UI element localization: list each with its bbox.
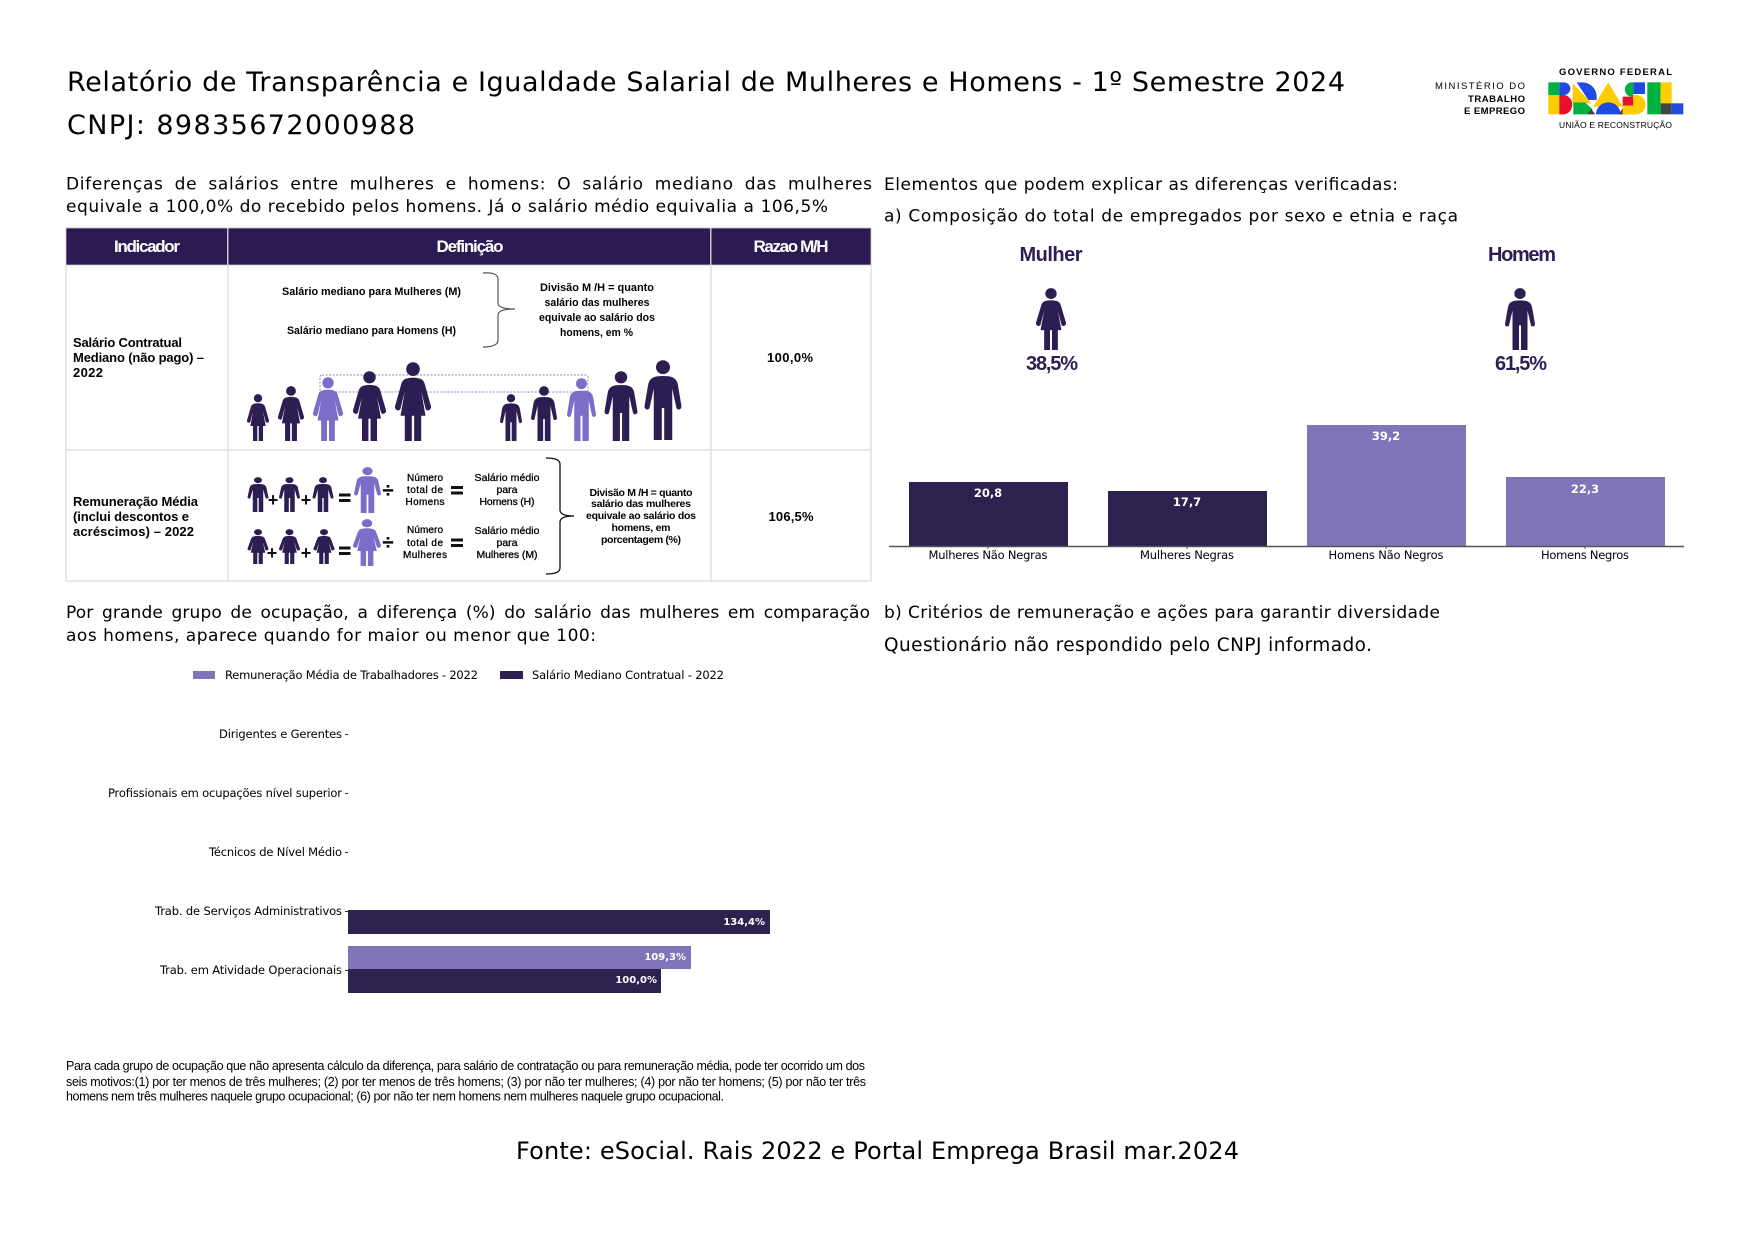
footnote: seis motivos:(1) por ter menos de três mulheres; (2) por ter menos de três homens; (3) por não ter mulheres; (4) por não ter homens; (5) por não ter três [66, 1075, 866, 1089]
icons: women ordered by salary [247, 362, 431, 441]
title [67, 67, 1345, 141]
icons: men ordered by salary [500, 360, 682, 441]
formula: women: Mulheres [403, 550, 447, 561]
formula: men: total de [407, 485, 443, 496]
row: Salário Contratual Mediano: Mediano (não pago) – [73, 350, 204, 365]
gender share: man: 61,5% [1495, 353, 1547, 375]
dashed median box [320, 375, 588, 392]
table header: Definição [436, 237, 504, 256]
text: division M/H: equivale ao salário dos [539, 312, 655, 324]
row: Remuneração Média [73, 458, 814, 574]
bar chart: occupation groups: Técnicos de Nível Médio [208, 845, 342, 859]
row: Remuneração Média: (inclui descontos e [73, 509, 189, 524]
bar chart: occupation groups: Profissionais em ocupações nível superior [108, 786, 342, 800]
heading: elements that explain differences [884, 175, 1458, 226]
text: division M/H in percent: porcentagem (%) [601, 534, 681, 546]
formula: women: ÷ [383, 532, 394, 554]
formula: men: ÷ [383, 480, 394, 502]
text: division M/H in percent: equivale ao salário dos [586, 510, 696, 522]
row: Remuneração Média: Remuneração Média [73, 494, 199, 509]
formula: men: Número [407, 473, 443, 484]
formula: women: + [267, 543, 277, 563]
formula: men: Homens (H) [480, 496, 534, 508]
text block: criteria [884, 603, 1440, 656]
text block: criteria: b) Critérios de remuneração e ações para garantir diversidade [884, 603, 1440, 623]
heading: elements that explain differences: Elementos que podem explicar as diferenças verificadas: [884, 175, 1398, 195]
bar chart: occupation groups [108, 727, 770, 993]
formula: men [248, 467, 540, 513]
formula: men: para [496, 484, 518, 496]
legend: Remuneração Média de Trabalhadores - 2022 [225, 668, 478, 682]
bar chart: occupation groups: Trab. em Atividade Operacionais [159, 963, 342, 977]
formula: women: Salário médio [474, 525, 540, 537]
formula: men: Salário médio [474, 472, 540, 484]
row: Salário Contratual Mediano: Salário mediano para Mulheres (M) [282, 286, 461, 298]
logo: Ministério do Trabalho e Emprego, Governo Federal [1435, 67, 1683, 130]
footnote: homens nem três mulheres naquele grupo ocupacional; (6) por não ter nem homens nem mulheres naquele grupo ocupacional. [66, 1090, 724, 1104]
source: Fonte: eSocial. Rais 2022 e Portal Emprega Brasil mar.2024 [516, 1137, 1239, 1165]
logo: Ministério do Trabalho e Emprego, Governo Federal: E EMPREGO [1464, 106, 1525, 117]
text: division M/H: salário das mulheres [544, 297, 650, 309]
bar chart: composition by sex and race: 39,2 [1372, 429, 1400, 443]
text: division M/H [539, 282, 655, 339]
text: division M/H in percent: homens, em [612, 522, 670, 534]
text: division M/H in percent: salário das mulheres [591, 498, 691, 510]
logo: Ministério do Trabalho e Emprego, Governo Federal: GOVERNO FEDERAL [1559, 67, 1672, 78]
bar chart: composition by sex and race: 20,8 [974, 486, 1002, 500]
formula: women: para [496, 537, 518, 549]
value 100,0%: 100,0% [767, 350, 813, 365]
text block: salary differences [66, 174, 872, 217]
text: division M/H: Divisão M /H = quanto [540, 282, 654, 294]
bar chart: occupation groups: Trab. de Serviços Administrativos [154, 904, 342, 918]
bar chart: composition by sex and race [889, 425, 1684, 562]
title: Relatório de Transparência e Igualdade Salarial de Mulheres e Homens - 1º Semestre 2024 [67, 67, 1345, 98]
row: Salário Contratual Mediano: Salário mediano para Homens (H) [287, 325, 456, 337]
gender share: woman: Mulher [1020, 244, 1083, 266]
legend: Salário Mediano Contratual - 2022 [532, 668, 724, 682]
text block: occupation groups [66, 603, 870, 646]
panel: indicator table [66, 228, 871, 581]
table header: Razao M/H [754, 237, 828, 256]
formula: men: + [301, 490, 311, 510]
legend [193, 668, 724, 682]
formula: women [247, 519, 540, 566]
bar chart: composition by sex and race: Mulheres Não Negras [928, 548, 1048, 562]
bar chart: composition by sex and race: 17,7 [1173, 495, 1201, 509]
table header: Indicador [114, 237, 180, 256]
gender share: woman [1020, 244, 1083, 375]
formula: women: total de [407, 538, 443, 549]
bar chart: occupation groups: 134,4% [723, 917, 765, 928]
icon: woman [1036, 288, 1066, 350]
formula: women: Número [407, 525, 443, 536]
bar chart: occupation groups: Dirigentes e Gerentes [219, 727, 342, 741]
formula: men: + [268, 490, 278, 510]
table header [66, 228, 871, 265]
table grid [66, 265, 871, 581]
bar chart: occupation groups: 100,0% [615, 975, 657, 986]
text block: salary differences: Diferenças de salários entre mulheres e homens: O salário mediano das mulheres [66, 174, 872, 194]
bar chart: composition by sex and race: Mulheres Negras [1140, 548, 1234, 562]
text block: occupation groups: Por grande grupo de ocupação, a diferença (%) do salário das mulheres em comparação [66, 603, 870, 623]
logo: Ministério do Trabalho e Emprego, Governo Federal: UNIÃO E RECONSTRUÇÃO [1559, 120, 1672, 130]
text block: criteria: Questionário não respondido pelo CNPJ informado. [884, 635, 1372, 656]
gender share: man: Homem [1488, 244, 1556, 266]
row: Salário Contratual Mediano: 2022 [73, 365, 103, 380]
icon: man [1505, 288, 1535, 350]
text: division M/H: homens, em % [560, 327, 633, 339]
formula: women: Mulheres (M) [476, 549, 538, 561]
text: division M/H in percent [586, 487, 696, 546]
formula: women: + [301, 543, 311, 563]
text block: occupation groups: aos homens, aparece quando for maior ou menor que 100: [66, 626, 596, 646]
bar chart: occupation groups: 109,3% [644, 952, 686, 963]
gender share: woman: 38,5% [1026, 353, 1078, 375]
footnote [66, 1059, 866, 1104]
bar chart: composition by sex and race: Homens Negros [1541, 548, 1629, 562]
formula: men: Homens [406, 497, 444, 508]
footnote: Para cada grupo de ocupação que não apresenta cálculo da diferença, para salário de contratação ou para remuneração média, pode ter ocorrido um dos [66, 1059, 865, 1073]
logo: Ministério do Trabalho e Emprego, Governo Federal: TRABALHO [1468, 94, 1525, 105]
row: Remuneração Média: acréscimos) – 2022 [73, 524, 194, 539]
gender share: man [1488, 244, 1556, 375]
text block: salary differences: equivale a 100,0% do recebido pelos homens. Já o salário médio equivalia a 106,5% [66, 197, 828, 217]
row: Salário Contratual Mediano [73, 273, 813, 441]
text: division M/H in percent: Divisão M /H = quanto [590, 487, 692, 499]
row: Salário Contratual Mediano: Salário Contratual [73, 335, 182, 350]
logo: Ministério do Trabalho e Emprego, Governo Federal: MINISTÉRIO DO [1435, 81, 1525, 92]
bar chart: composition by sex and race: 22,3 [1571, 482, 1599, 496]
brace [483, 273, 515, 347]
brace [546, 458, 574, 574]
bar chart: composition by sex and race: Homens Não Negros [1328, 548, 1444, 562]
title: CNPJ: 89835672000988 [67, 110, 415, 141]
value 106,5%: 106,5% [768, 509, 814, 524]
heading: elements that explain differences: a) Composição do total de empregados por sexo e etnia e raça [884, 206, 1458, 226]
